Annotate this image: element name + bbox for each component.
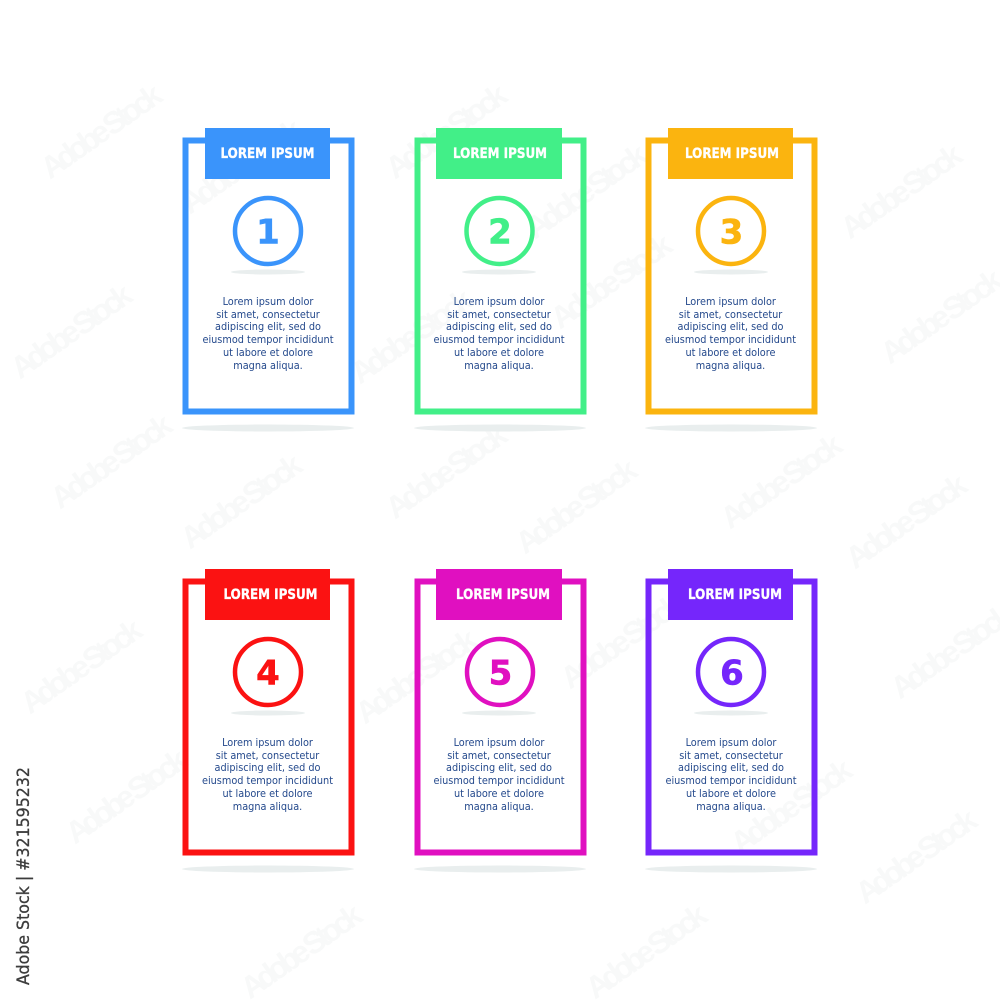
watermark pattern: Adobe Stock: [554, 586, 689, 696]
header tab: [668, 569, 793, 620]
card frame: [648, 140, 814, 412]
body text: Lorem ipsum dolor: [454, 295, 544, 308]
number badge: [698, 639, 764, 705]
header tab: [436, 569, 562, 620]
number badge: [698, 198, 764, 264]
body text: sit amet, consectetur: [216, 749, 319, 762]
header tab: [436, 128, 562, 179]
number badge: [235, 198, 301, 264]
body text: eiusmod tempor incididunt: [665, 333, 796, 346]
heading: LOREM IPSUM: [224, 587, 318, 603]
heading: LOREM IPSUM: [456, 587, 550, 603]
panel 1: blue card: [182, 128, 354, 432]
body text: sit amet, consectetur: [447, 749, 551, 762]
watermark pattern: Adobe Stock: [174, 111, 309, 221]
watermark pattern: Adobe Stock: [174, 446, 309, 556]
card frame: [418, 582, 584, 852]
card frame: [186, 140, 352, 412]
header tab: [205, 128, 330, 179]
body text: Lorem ipsum dolor: [222, 736, 313, 749]
watermark pattern: Adobe Stock: [849, 801, 984, 911]
number badge: [467, 639, 533, 705]
number: 5: [489, 654, 512, 694]
body text: ut labore et dolore: [223, 346, 313, 359]
watermark pattern: Adobe Stock: [4, 276, 139, 386]
watermark pattern: Adobe Stock: [379, 416, 514, 526]
watermark pattern: Adobe Stock: [834, 136, 969, 246]
body text: magna aliqua.: [696, 359, 765, 372]
body text: magna aliqua.: [233, 800, 302, 813]
card frame: [648, 582, 814, 852]
body text: eiusmod tempor incididunt: [665, 774, 797, 787]
body text: adipiscing elit, sed do: [446, 761, 552, 774]
body text: Lorem ipsum dolor: [686, 736, 776, 749]
body text: magna aliqua.: [464, 359, 534, 372]
watermark pattern: Adobe Stock: [344, 281, 479, 391]
watermark pattern: Adobe Stock: [14, 611, 149, 721]
body text: eiusmod tempor incididunt: [202, 774, 333, 787]
watermark pattern: Adobe Stock: [349, 621, 484, 731]
panel 3: amber card: [645, 128, 817, 432]
watermark pattern: Adobe Stock: [839, 466, 974, 576]
body text: adipiscing elit, sed do: [678, 761, 784, 774]
watermark pattern: Adobe Stock: [714, 426, 849, 536]
heading: LOREM IPSUM: [688, 587, 782, 603]
card frame: [186, 582, 352, 852]
number: 4: [256, 654, 280, 694]
body text: Lorem ipsum dolor: [223, 295, 313, 308]
card ground shadow: [645, 424, 817, 432]
body text: ut labore et dolore: [454, 346, 544, 359]
card ground shadow: [182, 424, 354, 432]
badge shadow: [462, 710, 536, 716]
header tab: [205, 569, 330, 620]
badge shadow: [694, 710, 768, 716]
watermark pattern: Adobe Stock: [34, 76, 169, 186]
panel 4: red card: [182, 569, 354, 872]
body text: eiusmod tempor incididunt: [202, 333, 334, 346]
heading: LOREM IPSUM: [220, 146, 314, 162]
watermark pattern: Adobe Stock: [59, 741, 194, 851]
watermark pattern: Adobe Stock: [544, 226, 679, 336]
body text: ut labore et dolore: [686, 346, 776, 359]
card ground shadow: [182, 866, 354, 872]
card ground shadow: [414, 866, 586, 872]
number: 3: [720, 212, 743, 252]
watermark pattern: Adobe Stock: [44, 406, 179, 516]
panel 6: purple card: [645, 569, 817, 872]
watermark pattern: Adobe Stock: [724, 751, 859, 861]
body text: magna aliqua.: [233, 359, 303, 372]
watermark pattern: Adobe Stock: [519, 136, 654, 246]
number: 1: [256, 212, 280, 252]
heading: LOREM IPSUM: [453, 146, 547, 162]
card ground shadow: [414, 424, 586, 432]
panel 5: magenta card: [414, 569, 586, 872]
body text: adipiscing elit, sed do: [215, 761, 321, 774]
body text: sit amet, consectetur: [447, 308, 551, 321]
body text: adipiscing elit, sed do: [446, 320, 552, 333]
body text: eiusmod tempor incididunt: [433, 774, 565, 787]
body text: magna aliqua.: [696, 800, 766, 813]
body text: ut labore et dolore: [686, 787, 776, 800]
number badge: [235, 639, 301, 705]
body text: ut labore et dolore: [223, 787, 313, 800]
body text: adipiscing elit, sed do: [215, 320, 321, 333]
badge shadow: [231, 270, 305, 274]
badge shadow: [462, 270, 536, 274]
body text: ut labore et dolore: [454, 787, 544, 800]
body text: sit amet, consectetur: [216, 308, 320, 321]
watermark pattern: Adobe Stock: [509, 451, 644, 561]
panel 2: green card: [414, 128, 586, 432]
number: 6: [720, 654, 744, 694]
body text: sit amet, consectetur: [679, 308, 782, 321]
number badge: [466, 198, 532, 264]
badge shadow: [694, 270, 768, 274]
body text: adipiscing elit, sed do: [678, 320, 784, 333]
header tab: [668, 128, 793, 179]
stock id caption: Adobe Stock | #321595232: [14, 767, 34, 985]
body text: sit amet, consectetur: [679, 749, 783, 762]
watermark pattern: Adobe Stock: [379, 76, 514, 186]
card frame: [418, 140, 584, 412]
number: 2: [488, 212, 512, 252]
body text: magna aliqua.: [464, 800, 534, 813]
body text: eiusmod tempor incididunt: [433, 333, 565, 346]
heading: LOREM IPSUM: [685, 146, 779, 162]
card ground shadow: [645, 866, 817, 872]
badge shadow: [231, 710, 305, 716]
body text: Lorem ipsum dolor: [454, 736, 544, 749]
body text: Lorem ipsum dolor: [685, 295, 776, 308]
